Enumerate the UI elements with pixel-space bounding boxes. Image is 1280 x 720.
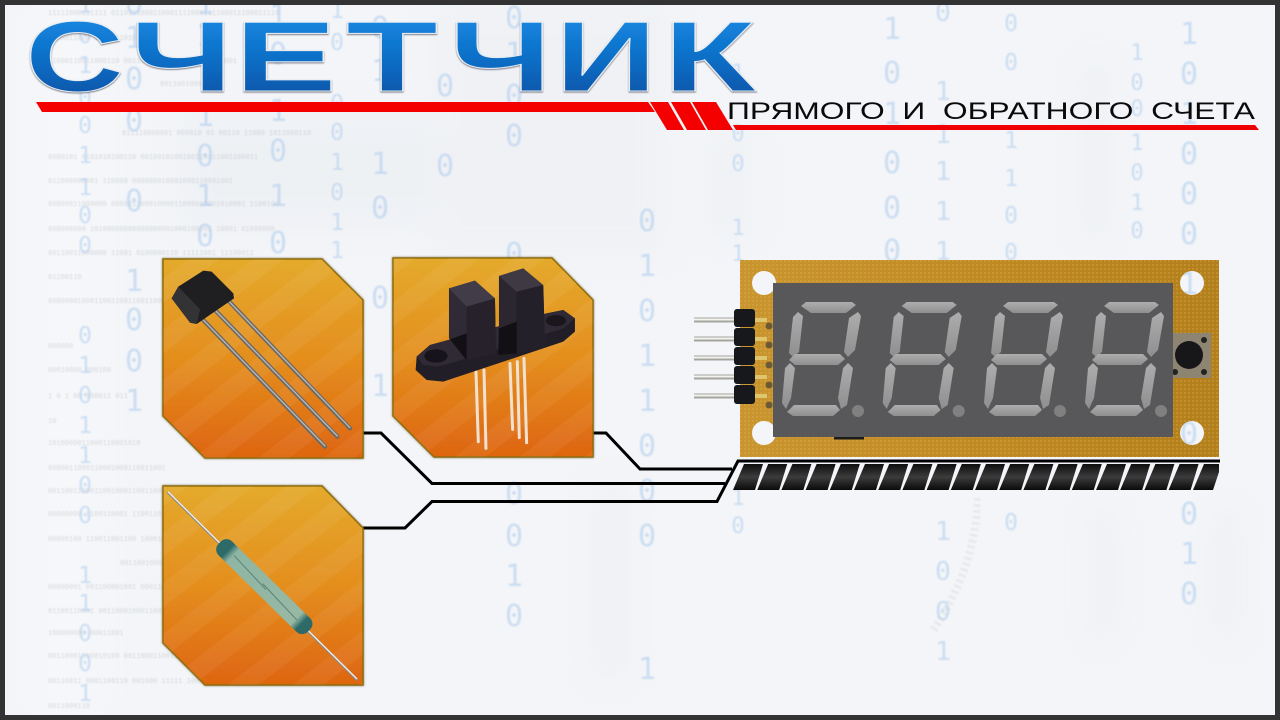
title: К (663, 1, 757, 113)
background: binary data pattern: 0111111001 (935, 0, 951, 667)
background: binary data pattern: 11111000111111 0110101000110001111000111100011100011110 (48, 10, 279, 18)
background: binary data pattern: 101001100010110011001 (78, 0, 92, 707)
hatched bar (733, 464, 1219, 490)
background: binary data pattern: 00110011000000 11001 0100000110 11111001 11100011 (48, 250, 254, 258)
title: И (555, 1, 657, 113)
background: binary data pattern: 00110010001100 011010000100 0011001100 (120, 560, 280, 568)
background: binary data pattern: 1 0 1 00 000011 011 (48, 393, 128, 401)
background: binary data pattern: 00110010001 (160, 81, 206, 89)
background: binary data pattern: 00110011 0001100110 001000 11111 100 11111 100 (48, 678, 241, 686)
background: binary data pattern: 101000 (883, 12, 901, 269)
push button (1170, 333, 1211, 378)
background: binary data pattern: 011000000001 110000 000000010001000110001001 (48, 178, 233, 186)
subtitle underline (733, 125, 1259, 130)
title underline (36, 102, 733, 130)
icon: transistor-shaped sensor (172, 271, 350, 447)
background: binary data pattern: 010000010 (505, 1, 523, 634)
background: binary data pattern: 000000000 10100000000000000001000100001 10001 01000000 (48, 226, 275, 234)
panel: optical sensor (393, 258, 593, 457)
panel: reed switch (163, 486, 363, 685)
display module (694, 260, 1219, 457)
title: Т (346, 1, 438, 113)
background: binary data pattern: 10001011 (330, 0, 344, 264)
background: binary data pattern: 10 (48, 418, 56, 426)
background: binary data pattern: 1001010 (1130, 41, 1144, 244)
background: binary data pattern: 0011000 (1004, 11, 1018, 536)
background: binary data pattern: 00 (436, 69, 454, 184)
subtitle: ПРЯМОГО И ОБРАТНОГО СЧЕТА (727, 98, 1255, 125)
background: binary data pattern: 011110000001 000010 01 00110 11000 1011000110 (122, 130, 311, 138)
background: binary data pattern: 010110001 (638, 204, 656, 687)
pcb board (740, 260, 1219, 457)
background: binary data pattern: 00000100 110011001100 10001000 (48, 536, 174, 544)
connector lines (363, 433, 1220, 528)
background: binary data pattern: 000000 (48, 343, 73, 351)
background: binary data pattern: 01100110001 0011000100011001100 1000100 (48, 608, 212, 616)
background: binary data pattern: 1100011000 101 0110101000 (48, 35, 153, 43)
icon: optical slot sensor (416, 268, 575, 448)
background: binary data pattern: 0011000110 (48, 703, 90, 711)
background: binary data pattern: 00000001000110011001100110001000 (48, 298, 182, 306)
background: binary data pattern: 11000110011000110 00110011001 001100110010001 (48, 58, 237, 66)
title: С (25, 1, 124, 113)
background: binary data pattern: 00000001 001100001001 000110 (48, 584, 166, 592)
pin header (694, 309, 772, 408)
title: Е (234, 1, 337, 113)
background: binary data pattern: 101010 (269, 0, 287, 261)
icon: reed switch (168, 492, 357, 679)
background: binary data pattern: 10100010010 (1180, 17, 1198, 612)
background: binary data pattern: 011001 (371, 11, 389, 404)
background: binary data pattern: 00110011000110010001100110001 (48, 488, 170, 496)
background: binary data pattern: 0000011000110001000110011001 (48, 465, 166, 473)
background: binary data pattern: 100000000 00011001 (48, 630, 124, 638)
background: binary data pattern: 1010000011000110001010 (48, 440, 140, 448)
background: binary data pattern: 0000101 0101010100110 0010010100100110011001100011 (48, 154, 258, 162)
background: binary data pattern: 00000011000000 00000110001000011000010001010001 1100100 (48, 201, 279, 209)
title: Ч (130, 1, 233, 113)
panel: hall sensor (163, 259, 363, 458)
background: binary data pattern: 00000000 1100110001 1100110 00110 (48, 511, 187, 519)
background: binary data pattern: 1001110 (731, 61, 745, 539)
seven-segment display (773, 283, 1173, 437)
background: binary data pattern: 00010000 000100 (48, 367, 111, 375)
background: binary data pattern: 01100110 (48, 274, 82, 282)
background: binary data pattern: 00110001100010100 0011000110011000 (48, 653, 191, 661)
title: Ч (449, 1, 552, 113)
